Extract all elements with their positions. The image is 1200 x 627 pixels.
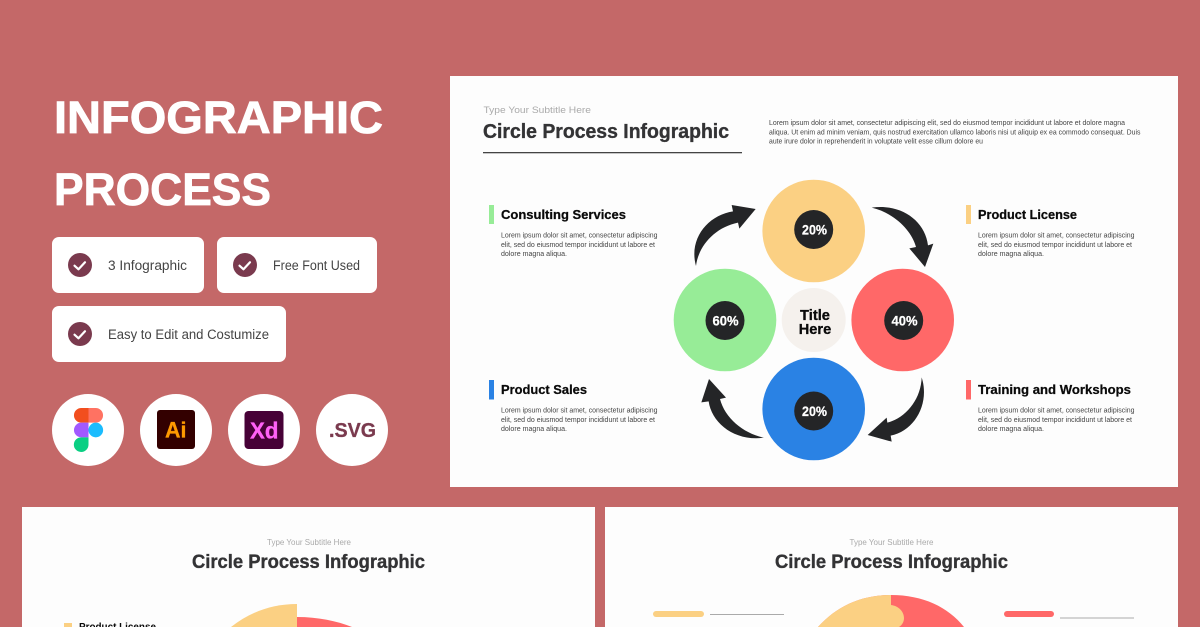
item: Product License <box>966 205 1135 258</box>
circle: yellow 20% <box>762 180 865 282</box>
icon: Adobe XD <box>228 394 300 466</box>
center circle: Title Here: Here <box>799 322 831 338</box>
feature chip: 3 Infographic <box>52 237 204 293</box>
center circle: Title Here: Title <box>800 308 830 324</box>
panel: bottom left slide preview: Type Your Subtitle Here <box>267 538 352 547</box>
circle: green 60%: 60% <box>712 314 738 328</box>
icon: SVG: .SVG <box>329 420 376 442</box>
heading: infographic process: PROCESS <box>54 164 271 215</box>
circle: blue 20%: 20% <box>802 404 827 419</box>
icon: Adobe XD: Xd <box>250 418 278 444</box>
intro paragraph <box>769 120 1141 146</box>
item: Consulting Services: Consulting Services <box>501 207 626 222</box>
feature chip: Free Font Used: Free Font Used <box>273 258 360 273</box>
arrow: bottom right <box>868 377 924 442</box>
intro paragraph: aute irure dolor in reprehenderit in voluptate velit esse cillum dolore eu <box>769 138 983 146</box>
circle: green 60% <box>674 269 776 371</box>
circle: red 40% <box>851 269 954 371</box>
title underline <box>483 152 742 153</box>
item: Training and Workshops: elit, sed do eiusmod tempor incididunt ut labore et <box>978 417 1132 424</box>
feature chip: Easy to Edit and Costumize: Easy to Edit and Costumize <box>108 327 269 342</box>
panel: bottom right slide preview <box>605 507 1178 627</box>
feature chip: Free Font Used <box>217 237 377 293</box>
item: Consulting Services <box>489 205 658 258</box>
item: Consulting Services: Lorem ipsum dolor sit amet, consectetur adipiscing <box>501 233 658 240</box>
heading: infographic process: INFOGRAPHIC <box>54 92 383 143</box>
intro paragraph: Lorem ipsum dolor sit amet, consectetur adipiscing elit, sed do eiusmod tempor incididunt ut labore et dolore magna <box>769 120 1125 127</box>
panel: bottom right slide preview: Circle Process Infographic <box>775 552 1008 573</box>
item: Product Sales: Lorem ipsum dolor sit amet, consectetur adipiscing <box>501 408 658 415</box>
label: yellow marker <box>653 611 784 617</box>
panel: bottom right slide preview: Type Your Subtitle Here <box>850 538 934 547</box>
subtitle: Type Your Subtitle Here <box>484 105 591 116</box>
feature chip: Easy to Edit and Costumize <box>52 306 286 362</box>
circle: yellow 20%: 20% <box>802 222 827 238</box>
arrow: top right <box>872 207 933 267</box>
circle: red 40%: 40% <box>892 314 918 328</box>
arrow: bottom left <box>701 379 764 438</box>
icon: SVG <box>316 394 388 466</box>
item: Product Sales: Product Sales <box>501 382 587 397</box>
item: Product Sales: dolore magna aliqua. <box>501 426 567 433</box>
item: Consulting Services: dolore magna aliqua. <box>501 251 567 258</box>
panel: bottom left slide preview: Circle Process Infographic <box>192 552 425 573</box>
circle: blue 20% <box>762 358 865 460</box>
item: Training and Workshops <box>966 380 1135 433</box>
item: Product License: Product License <box>978 207 1077 222</box>
panel: main circle process slide <box>450 76 1178 487</box>
item: Product License: Lorem ipsum dolor sit amet, consectetur adipiscing <box>978 233 1135 240</box>
intro paragraph: aliqua. Ut enim ad minim veniam, quis nostrud exercitation ullamco laboris nisi ut aliquip ex ea commodo consequat. Duis <box>769 129 1141 136</box>
center circle: Title Here <box>782 288 846 352</box>
item: Training and Workshops: Lorem ipsum dolor sit amet, consectetur adipiscing <box>978 408 1135 415</box>
item: Training and Workshops: dolore magna aliqua. <box>978 426 1044 433</box>
arrow: top left <box>694 205 756 266</box>
heading: infographic process <box>54 92 383 215</box>
item: Product License: elit, sed do eiusmod tempor incididunt ut labore et <box>978 242 1132 249</box>
feature chip: 3 Infographic: 3 Infographic <box>108 258 187 273</box>
icon: Adobe Illustrator <box>140 394 212 466</box>
slide title: Circle Process Infographic <box>483 121 729 143</box>
item: Product Sales: elit, sed do eiusmod tempor incididunt ut labore et <box>501 417 655 424</box>
item: Product Sales <box>489 380 658 433</box>
item: Product License: dolore magna aliqua. <box>978 251 1044 258</box>
icon: Figma <box>52 394 124 466</box>
pie chart: partial segments <box>231 604 352 627</box>
circular chart: partial segments <box>818 595 964 627</box>
item: Training and Workshops: Training and Workshops <box>978 382 1131 397</box>
icon: Adobe Illustrator: Ai <box>165 418 186 442</box>
item: Consulting Services: elit, sed do eiusmod tempor incididunt ut labore et <box>501 242 655 249</box>
panel: bottom left slide preview <box>22 507 595 627</box>
label: red marker <box>1004 611 1134 618</box>
